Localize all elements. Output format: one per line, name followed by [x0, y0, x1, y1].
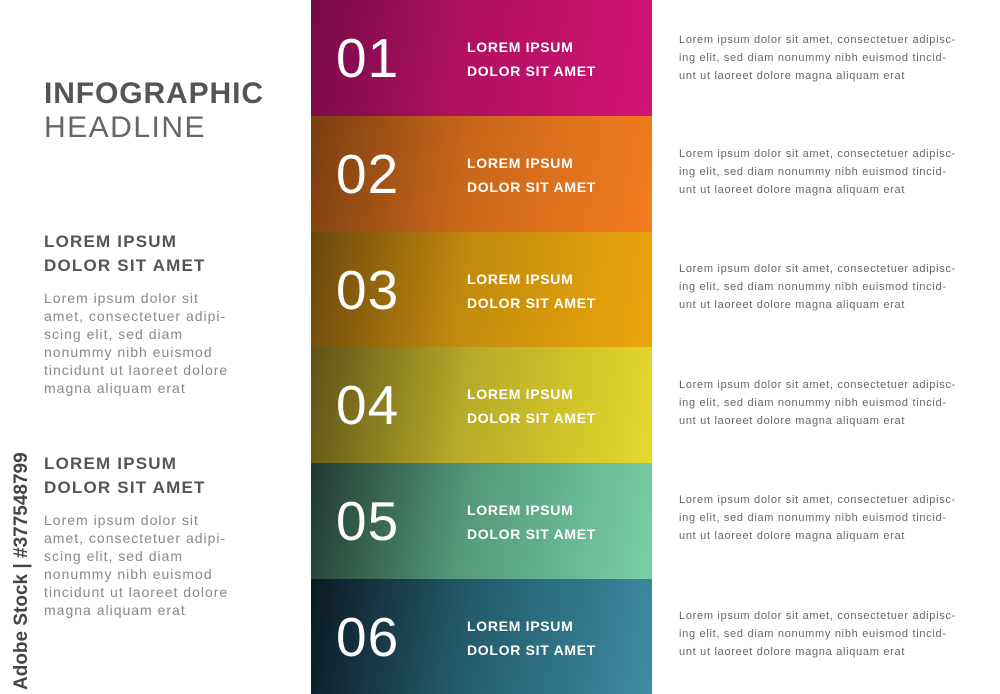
heading 1: LOREM IPSUM	[44, 232, 177, 251]
band 05: LOREM IPSUM	[467, 502, 573, 518]
band 05: DOLOR SIT AMET	[467, 526, 596, 542]
band 03: LOREM IPSUM	[467, 271, 573, 287]
band 05	[311, 463, 652, 579]
description 05: ing elit, sed diam nonummy nibh euismod tincid-	[679, 512, 947, 524]
description 01: unt ut laoreet dolore magna aliquam erat	[679, 70, 905, 82]
title: INFOGRAPHIC	[44, 77, 264, 110]
title	[44, 77, 264, 144]
heading 1: DOLOR SIT AMET	[44, 256, 206, 275]
description 03: unt ut laoreet dolore magna aliquam erat	[679, 299, 905, 311]
title: HEADLINE	[44, 111, 206, 144]
description 05	[679, 494, 956, 542]
band 02: DOLOR SIT AMET	[467, 179, 596, 195]
band 03: 03	[336, 259, 399, 321]
description 04: unt ut laoreet dolore magna aliquam erat	[679, 415, 905, 427]
description 06	[679, 610, 956, 658]
band 01: DOLOR SIT AMET	[467, 63, 596, 79]
band 06: 06	[336, 606, 399, 668]
heading 2: LOREM IPSUM	[44, 454, 177, 473]
band 06: LOREM IPSUM	[467, 618, 573, 634]
band 03: DOLOR SIT AMET	[467, 295, 596, 311]
body text 1: amet, consectetuer adipi-	[44, 308, 226, 324]
band 01: LOREM IPSUM	[467, 39, 573, 55]
body text 2: magna aliquam erat	[44, 602, 186, 618]
description 05: unt ut laoreet dolore magna aliquam erat	[679, 530, 905, 542]
body text 1: magna aliquam erat	[44, 380, 186, 396]
description 04: ing elit, sed diam nonummy nibh euismod tincid-	[679, 397, 947, 409]
body text 1	[44, 290, 228, 396]
left section 1	[44, 232, 228, 396]
description 02	[679, 148, 956, 196]
description 01: Lorem ipsum dolor sit amet, consectetuer adipisc-	[679, 34, 956, 46]
band 02	[311, 116, 652, 232]
band 02: LOREM IPSUM	[467, 155, 573, 171]
body text 2: amet, consectetuer adipi-	[44, 530, 226, 546]
body text 2	[44, 512, 228, 618]
body text 1: nonummy nibh euismod	[44, 344, 213, 360]
body text 1: Lorem ipsum dolor sit	[44, 290, 199, 306]
description 06: unt ut laoreet dolore magna aliquam erat	[679, 646, 905, 658]
band 04: LOREM IPSUM	[467, 386, 573, 402]
body text 1: tincidunt ut laoreet dolore	[44, 362, 228, 378]
description 03	[679, 263, 956, 311]
band 04: 04	[336, 374, 399, 436]
band 06: DOLOR SIT AMET	[467, 642, 596, 658]
body text 2: tincidunt ut laoreet dolore	[44, 584, 228, 600]
description 06: Lorem ipsum dolor sit amet, consectetuer adipisc-	[679, 610, 956, 622]
body text 2: Lorem ipsum dolor sit	[44, 512, 199, 528]
band 04	[311, 347, 652, 463]
heading 2: DOLOR SIT AMET	[44, 478, 206, 497]
body text 2: nonummy nibh euismod	[44, 566, 213, 582]
watermark id text: Adobe Stock | #377548799	[11, 452, 32, 690]
band 05: 05	[336, 490, 399, 552]
description 04	[679, 379, 956, 427]
description 05: Lorem ipsum dolor sit amet, consectetuer adipisc-	[679, 494, 956, 506]
body text 1: scing elit, sed diam	[44, 326, 183, 342]
description 04: Lorem ipsum dolor sit amet, consectetuer adipisc-	[679, 379, 956, 391]
band 03	[311, 232, 652, 348]
band 01	[311, 0, 652, 116]
description 03: Lorem ipsum dolor sit amet, consectetuer adipisc-	[679, 263, 956, 275]
left section 2	[44, 454, 228, 618]
band 04: DOLOR SIT AMET	[467, 410, 596, 426]
band 02: 02	[336, 143, 399, 205]
body text 2: scing elit, sed diam	[44, 548, 183, 564]
heading 2	[44, 454, 206, 497]
description 06: ing elit, sed diam nonummy nibh euismod tincid-	[679, 628, 947, 640]
heading 1	[44, 232, 206, 275]
description 02: ing elit, sed diam nonummy nibh euismod tincid-	[679, 166, 947, 178]
description 02: Lorem ipsum dolor sit amet, consectetuer adipisc-	[679, 148, 956, 160]
band 01: 01	[336, 27, 399, 89]
description 01	[679, 34, 956, 82]
description 01: ing elit, sed diam nonummy nibh euismod tincid-	[679, 52, 947, 64]
description 03: ing elit, sed diam nonummy nibh euismod tincid-	[679, 281, 947, 293]
band 06	[311, 579, 652, 694]
description 02: unt ut laoreet dolore magna aliquam erat	[679, 184, 905, 196]
